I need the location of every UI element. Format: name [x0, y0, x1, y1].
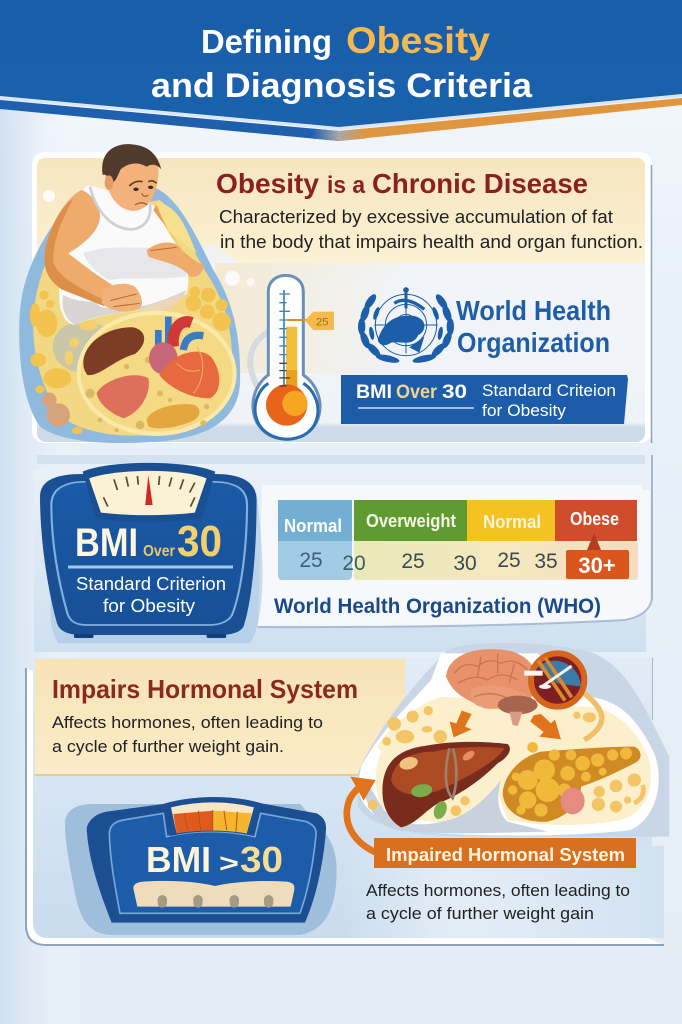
chart: BMI category table	[278, 500, 638, 580]
heading: chronic disease: Chronic Disease	[372, 168, 588, 199]
title	[151, 20, 533, 105]
chart: BMI category table: 30	[453, 552, 477, 575]
organ: pancreas	[147, 404, 200, 428]
organ: stomach	[97, 375, 149, 418]
text: definition	[219, 206, 643, 252]
text: caption: Affects hormones, often leading to	[366, 881, 630, 900]
logo: World Health Organization	[358, 287, 611, 364]
icon: weighing scale: BMI	[75, 521, 138, 565]
illustration: brain, liver and pancreas	[347, 643, 669, 853]
illustration: man with visceral fat and organs	[19, 144, 255, 443]
organ: pancreas	[503, 742, 641, 822]
chart: BMI category table: 25	[401, 550, 425, 573]
text: caption: a cycle of further weight gain	[366, 904, 594, 923]
icon: weighing scale: 30	[177, 517, 222, 566]
label: impaired hormonal system: Impaired Hormonal System	[386, 844, 625, 865]
title: Obesity	[346, 20, 490, 61]
banner: BMI over 30	[341, 375, 628, 424]
text: caption	[366, 881, 630, 923]
box: impaired hormonal caption background	[341, 846, 664, 938]
organ: heart	[149, 317, 219, 398]
icon: BMI scale: BMI	[146, 839, 211, 880]
title: and Diagnosis Criteria	[151, 67, 533, 105]
text: hormonal effects: Affects hormones, often leading to	[52, 714, 323, 732]
text: hormonal effects: a cycle of further weight gain.	[52, 738, 284, 756]
icon: BMI scale: >	[219, 848, 239, 878]
organ: brain	[446, 649, 538, 726]
chart: BMI category table: 35	[534, 550, 558, 573]
heading: impairs hormonal system: Impairs Hormonal System	[52, 674, 358, 704]
chart: BMI category table: 25	[497, 549, 521, 572]
text: definition: Characterized by excessive accumulation of fat	[219, 206, 613, 227]
arrows: brain to organs	[450, 711, 561, 739]
text: definition: in the body that impairs health and organ function.	[220, 231, 643, 252]
banner: BMI over 30: Standard Criteion	[482, 382, 616, 400]
header banner	[0, 0, 682, 141]
chart: BMI category table: 20	[342, 552, 366, 575]
organ cavity	[77, 311, 237, 436]
icon: weighing scale: Standard Criterion	[76, 574, 226, 594]
chart: BMI category table: Obese	[570, 509, 619, 529]
label: impaired hormonal system	[374, 838, 636, 868]
chart: BMI category table: Normal	[483, 512, 541, 532]
icon: weighing scale	[40, 463, 262, 643]
title: Defining	[201, 23, 332, 60]
icon: BMI scale: 30	[240, 839, 283, 880]
icon: thermometer: 25	[316, 316, 329, 328]
chart: BMI category table: 30+	[578, 553, 616, 578]
banner: BMI over 30: Over	[396, 382, 438, 403]
torso and arms	[45, 185, 204, 325]
panel: chronic disease	[19, 144, 652, 443]
label: World Health Organization (WHO): World Health Organization (WHO)	[274, 595, 601, 618]
banner: BMI over 30: 30	[442, 382, 467, 403]
banner: BMI over 30: for Obesity	[482, 402, 567, 420]
panel: impairs hormonal system	[26, 643, 669, 945]
text: hormonal effects	[52, 714, 323, 756]
organ: liver	[382, 742, 510, 827]
head	[102, 144, 161, 211]
icon: weighing scale: for Obesity	[103, 596, 195, 616]
heading: chronic disease: Obesity	[216, 168, 319, 199]
icon: prohibited signal	[524, 653, 584, 707]
icon: BMI scale	[65, 797, 337, 935]
chart: BMI category table: 25	[299, 549, 323, 572]
heading: chronic disease	[216, 168, 588, 199]
panel: BMI scale and categories	[34, 455, 652, 652]
banner: BMI over 30: BMI	[356, 382, 392, 403]
heading: chronic disease: is a	[327, 172, 366, 199]
icon: weighing scale: Over	[143, 543, 175, 560]
chart: BMI category table: Normal	[284, 516, 342, 536]
logo: World Health Organization: World Health	[456, 295, 611, 326]
icon: thermometer	[253, 275, 334, 439]
organ: liver	[83, 327, 144, 375]
chart: BMI category table: Overweight	[366, 511, 456, 531]
arrow: feedback cycle	[347, 777, 378, 853]
logo: World Health Organization: Organization	[457, 327, 610, 358]
